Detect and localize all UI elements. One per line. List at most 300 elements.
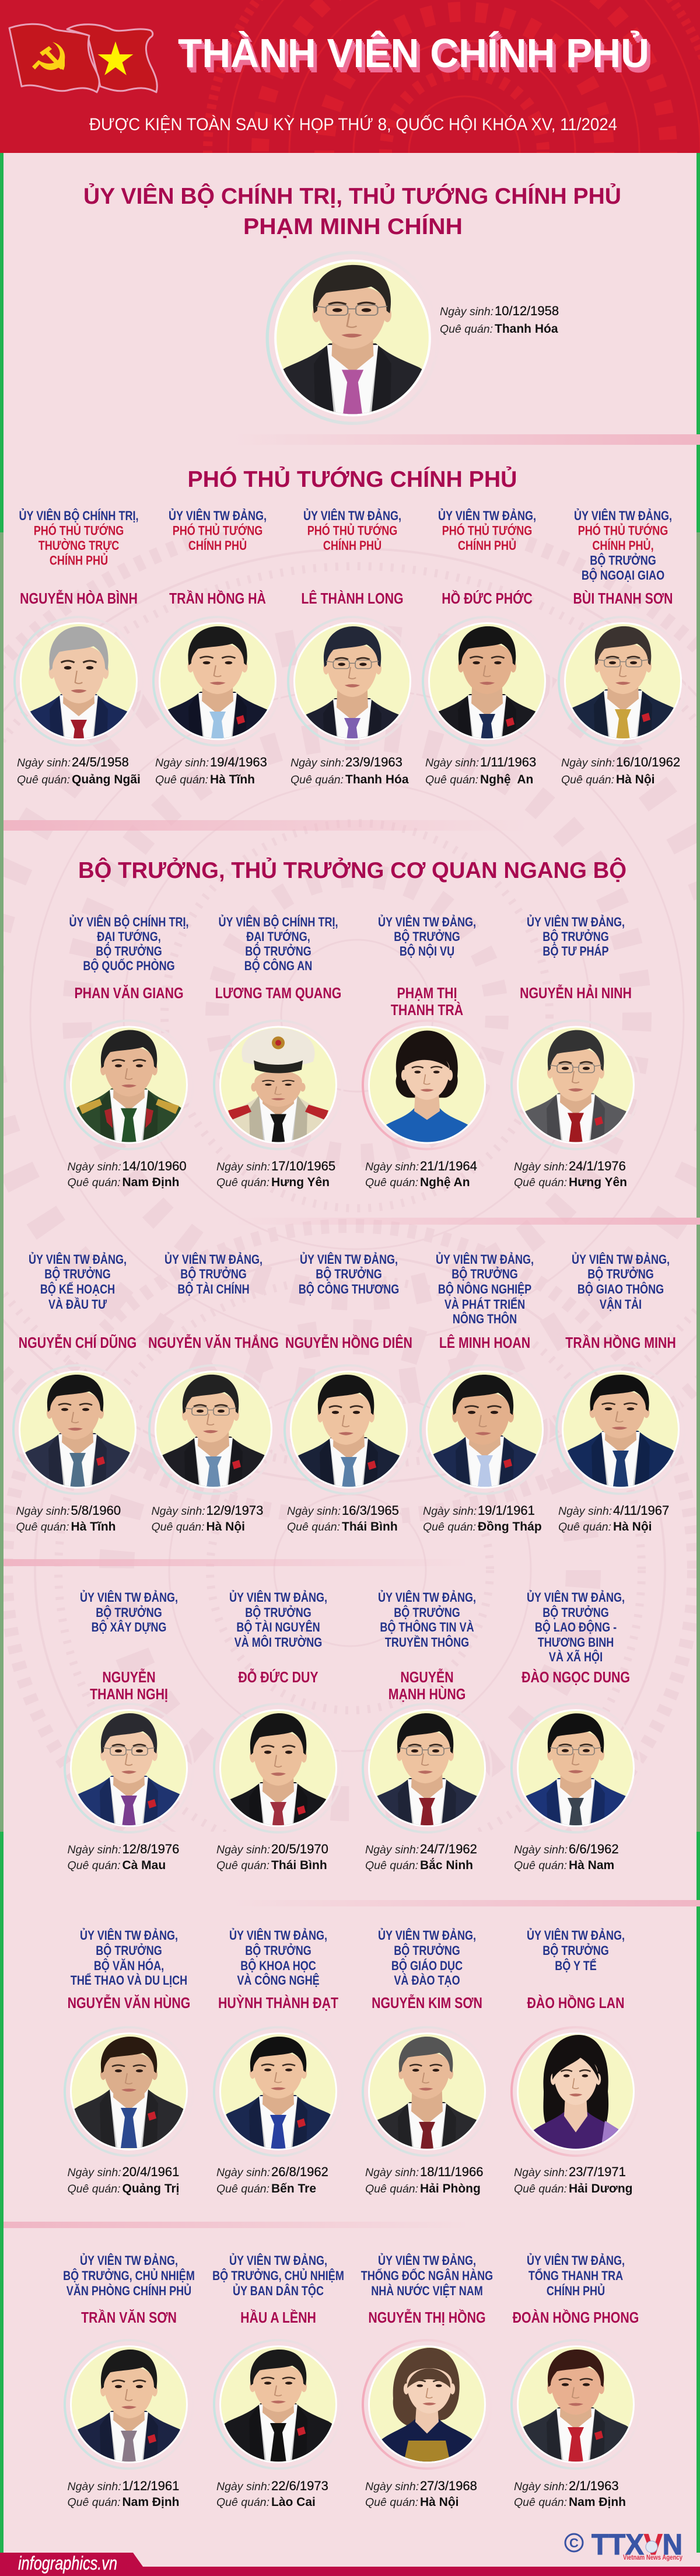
role: VÀ MÔI TRƯỜNG xyxy=(235,1634,322,1650)
person: Lê Minh Hoan xyxy=(418,1252,552,1533)
bio: 24/1/1976 xyxy=(569,1159,626,1173)
role: BỘ TRƯỞNG xyxy=(245,1605,312,1620)
person: Nguyễn Thanh Nghị xyxy=(62,1589,196,1872)
name: ĐÀO NGỌC DUNG xyxy=(522,1668,630,1686)
bio: Ngày sinh: xyxy=(365,2166,419,2179)
footer bar xyxy=(0,2553,700,2576)
bio: 1/12/1961 xyxy=(123,2479,179,2493)
bio: Thái Bình xyxy=(271,1859,327,1872)
panel: deputy prime ministers xyxy=(12,508,690,786)
bio: 23/9/1963 xyxy=(345,755,402,769)
bio xyxy=(216,2164,328,2195)
bio: Hà Tĩnh xyxy=(210,773,255,786)
portrait xyxy=(509,1704,643,1838)
role: TỔNG THANH TRA xyxy=(528,2268,623,2283)
person: Trần Hồng Hà xyxy=(150,508,285,786)
name: NGUYỄN xyxy=(102,1668,156,1686)
role: ỦY VIÊN BỘ CHÍNH TRỊ, xyxy=(218,914,338,929)
bio: Quê quán: xyxy=(423,1521,476,1533)
bio: 4/11/1967 xyxy=(613,1503,669,1518)
role: CHÍNH PHỦ xyxy=(323,538,382,553)
portrait xyxy=(10,1365,145,1494)
bio: Phạm Minh Chính: 10/12/1958 xyxy=(495,304,559,318)
bio: Quê quán: xyxy=(365,2496,418,2509)
name: LÊ MINH HOAN xyxy=(439,1334,530,1352)
role xyxy=(527,2253,625,2298)
person: Đào Ngọc Dung xyxy=(509,1589,643,1872)
bio: Hà Nội xyxy=(206,1520,245,1533)
role xyxy=(303,508,401,553)
name: TRẦN HỒNG MINH xyxy=(565,1334,676,1352)
portrait xyxy=(150,617,285,752)
role xyxy=(572,1252,670,1312)
bio: Quê quán: xyxy=(558,1521,611,1533)
portrait xyxy=(360,2027,494,2162)
bio: Ngày sinh: xyxy=(365,1843,419,1856)
role: ỦY BAN DÂN TỘC xyxy=(233,2283,324,2298)
role: ỦY VIÊN TW ĐẢNG, xyxy=(80,1589,178,1605)
role: CHÍNH PHỦ xyxy=(547,2283,605,2298)
role: BỘ TRƯỞNG xyxy=(245,943,312,958)
bio xyxy=(216,2479,328,2509)
header banner xyxy=(0,0,700,153)
bio xyxy=(514,2479,626,2509)
person: Trần Văn Sơn xyxy=(62,2253,196,2509)
bio xyxy=(68,1842,179,1872)
role: PHÓ THỦ TƯỚNG xyxy=(442,523,532,538)
bio xyxy=(514,2164,632,2195)
role xyxy=(527,1589,625,1664)
role: THỐNG ĐỐC NGÂN HÀNG xyxy=(361,2268,493,2283)
bio: Phạm Minh Chính: Ngày sinh: xyxy=(440,305,494,318)
name: HẦU A LỀNH xyxy=(240,2309,316,2327)
name: THANH NGHỊ xyxy=(90,1686,168,1703)
bio xyxy=(425,755,536,786)
role: ỦY VIÊN TW ĐẢNG, xyxy=(438,508,536,523)
portrait xyxy=(556,617,690,750)
bio: Quảng Trị xyxy=(123,2182,180,2195)
role: BỘ TRƯỞNG xyxy=(590,553,656,568)
name: BÙI THANH SƠN xyxy=(573,590,673,608)
bio: 12/9/1973 xyxy=(206,1503,263,1518)
bio: Quê quán: xyxy=(68,2496,121,2509)
name: TRẦN HỒNG HÀ xyxy=(169,590,266,608)
bio: Ngày sinh: xyxy=(68,2480,121,2493)
bio: Lào Cai xyxy=(271,2495,316,2509)
name: TRẦN VĂN SƠN xyxy=(81,2309,177,2327)
bio: Quê quán: xyxy=(68,1859,121,1872)
bio: Nghệ An xyxy=(420,1176,470,1189)
role: CHÍNH PHỦ, xyxy=(592,538,654,553)
role: ỦY VIÊN TW ĐẢNG, xyxy=(229,2253,327,2268)
bio: 1/11/1963 xyxy=(480,755,536,769)
person: Nguyễn Hòa Bình xyxy=(12,508,146,786)
bio: 5/8/1960 xyxy=(71,1503,121,1518)
role: ỦY VIÊN TW ĐẢNG, xyxy=(527,1927,625,1943)
role: VĂN PHÒNG CHÍNH PHỦ xyxy=(66,2283,191,2298)
name: NGUYỄN VĂN HÙNG xyxy=(68,1993,190,2012)
person: Trần Hồng Minh xyxy=(554,1252,688,1533)
heading: ministers: BỘ TRƯỞNG, THỦ TRƯỞNG CƠ QUAN NGANG BỘ xyxy=(78,857,626,883)
bio: Quê quán: xyxy=(425,773,478,786)
role: BỘ TRƯỞNG xyxy=(394,929,460,944)
role: THƯƠNG BINH xyxy=(538,1636,614,1650)
role: ỦY VIÊN TW ĐẢNG, xyxy=(378,1589,476,1605)
name: NGUYỄN VĂN THẮNG xyxy=(148,1333,279,1352)
panel: ministers row 1 xyxy=(62,914,643,1189)
portrait xyxy=(360,1704,494,1838)
bio: 20/4/1961 xyxy=(123,2164,179,2179)
role xyxy=(19,508,139,568)
name xyxy=(391,985,463,1019)
bio: Ngày sinh: xyxy=(287,1505,341,1518)
portrait xyxy=(211,2340,345,2469)
role: ỦY VIÊN BỘ CHÍNH TRỊ, xyxy=(19,508,139,523)
role xyxy=(378,914,476,958)
person: Lê Thành Long xyxy=(285,508,419,786)
bio: Bến Tre xyxy=(271,2182,316,2195)
bio: Quê quán: xyxy=(514,2183,567,2195)
bio: Ngày sinh: xyxy=(17,757,71,769)
person: Đoàn Hồng Phong xyxy=(509,2253,643,2509)
title: THÀNH VIÊN CHÍNH PHỦ xyxy=(178,30,649,76)
logo: TTXVN: TTXVN xyxy=(592,2528,682,2561)
bio: Quê quán: xyxy=(514,1859,567,1872)
role: BỘ TRƯỞNG xyxy=(542,1605,609,1620)
bio: Ngày sinh: xyxy=(68,1160,121,1173)
bio: Quê quán: xyxy=(155,773,208,786)
name xyxy=(388,1668,466,1703)
role: ỦY VIÊN TW ĐẢNG, xyxy=(303,508,401,523)
bio xyxy=(17,755,141,786)
portrait xyxy=(62,1020,196,1149)
bio: 22/6/1973 xyxy=(271,2479,328,2493)
bio xyxy=(68,2479,180,2509)
bio: 16/10/1962 xyxy=(616,755,680,769)
bio: Phạm Minh Chính xyxy=(440,304,559,336)
role: ỦY VIÊN BỘ CHÍNH TRỊ, xyxy=(69,914,189,929)
name: HỒ ĐỨC PHỚC xyxy=(442,590,533,608)
role: BỘ TRƯỞNG xyxy=(96,1943,162,1958)
role xyxy=(229,1589,327,1650)
person: Phan Văn Giang xyxy=(62,914,196,1189)
role: BỘ TRƯỞNG xyxy=(394,1605,460,1620)
role xyxy=(29,1252,127,1312)
role xyxy=(378,1927,476,1988)
bio: Quê quán: xyxy=(17,773,70,786)
bio xyxy=(216,1842,328,1872)
bio: Quê quán: xyxy=(290,773,344,786)
bio: Hải Dương xyxy=(569,2182,632,2195)
name: THANH TRÀ xyxy=(391,1001,463,1019)
portrait xyxy=(211,1020,345,1155)
role xyxy=(229,1927,327,1988)
role: ỦY VIÊN TW ĐẢNG, xyxy=(80,2253,178,2268)
role xyxy=(63,2253,195,2298)
bio xyxy=(514,1159,627,1189)
role: VÀ ĐẦU TƯ xyxy=(48,1297,107,1312)
bio: Hà Nội xyxy=(616,773,655,786)
bio: Ngày sinh: xyxy=(514,2480,568,2493)
role xyxy=(574,508,672,583)
role: BỘ THÔNG TIN VÀ xyxy=(380,1619,474,1634)
role: PHÓ THỦ TƯỚNG xyxy=(34,523,124,538)
icon: Vietnam flag xyxy=(67,25,157,92)
role: BỘ TRƯỞNG xyxy=(316,1266,382,1281)
role: BỘ QUỐC PHÒNG xyxy=(83,958,175,973)
role: ĐẠI TƯỚNG, xyxy=(97,929,161,944)
name: NGUYỄN HỒNG DIÊN xyxy=(285,1333,412,1352)
bio: Ngày sinh: xyxy=(514,1843,568,1856)
role xyxy=(71,1927,187,1988)
portrait: Phạm Minh Chính xyxy=(264,253,442,423)
bio: Ngày sinh: xyxy=(152,1505,205,1518)
name: NGUYỄN CHÍ DŨNG xyxy=(19,1333,136,1352)
role: BỘ GIAO THÔNG xyxy=(578,1281,664,1296)
bio: 19/4/1963 xyxy=(210,755,267,769)
person: Nguyễn Chí Dũng xyxy=(10,1252,145,1533)
role: THỂ THAO VÀ DU LỊCH xyxy=(71,1973,187,1988)
bio xyxy=(365,2479,477,2509)
role: BỘ TRƯỞNG xyxy=(180,1266,247,1281)
heading: deputy prime ministers: PHÓ THỦ TƯỚNG CHÍNH PHỦ xyxy=(188,466,517,492)
role: NÔNG THÔN xyxy=(453,1311,517,1326)
name: PHẠM THỊ xyxy=(397,985,457,1002)
role: ỦY VIÊN TW ĐẢNG, xyxy=(527,914,625,929)
role: ỦY VIÊN TW ĐẢNG, xyxy=(436,1252,534,1267)
person: Nguyễn Kim Sơn xyxy=(360,1927,494,2195)
role: VÀ ĐÀO TẠO xyxy=(394,1973,460,1988)
heading: prime minister role: ỦY VIÊN BỘ CHÍNH TRỊ, THỦ TƯỚNG CHÍNH PHỦ xyxy=(83,183,621,209)
person: Nguyễn Văn Thắng xyxy=(146,1252,281,1533)
name: PHAN VĂN GIANG xyxy=(74,984,184,1002)
bio: Ngày sinh: xyxy=(514,2166,568,2179)
bio: Quê quán: xyxy=(68,1176,121,1189)
person: Nguyễn Hải Ninh xyxy=(509,914,643,1189)
name: NGUYỄN HÒA BÌNH xyxy=(20,589,138,608)
role: BỘ TRƯỞNG, CHỦ NHIỆM xyxy=(63,2268,195,2283)
portrait xyxy=(282,1365,416,1497)
bio: 21/1/1964 xyxy=(420,1159,477,1173)
bio xyxy=(287,1503,399,1533)
bio: 12/8/1976 xyxy=(123,1842,179,1856)
portrait xyxy=(211,2027,345,2156)
bio xyxy=(152,1503,263,1533)
bio xyxy=(561,755,680,786)
portrait xyxy=(418,1365,552,1496)
bio: Quê quán: xyxy=(561,773,614,786)
bio: Phạm Minh Chính: Thanh Hóa xyxy=(495,322,558,336)
name: LÊ THÀNH LONG xyxy=(301,590,404,608)
bio: Ngày sinh: xyxy=(216,2166,270,2179)
role: ỦY VIÊN TW ĐẢNG, xyxy=(527,2253,625,2268)
bio: Nam Định xyxy=(123,2495,180,2509)
role: THƯỜNG TRỰC xyxy=(38,538,119,553)
portrait xyxy=(13,616,143,747)
name: ĐOÀN HỒNG PHONG xyxy=(513,2309,639,2327)
portrait xyxy=(363,2340,491,2477)
bio: Ngày sinh: xyxy=(365,2480,419,2493)
bio: Quê quán: xyxy=(365,1859,418,1872)
role: ĐẠI TƯỚNG, xyxy=(246,929,310,944)
role: NHÀ NƯỚC VIỆT NAM xyxy=(371,2283,483,2298)
role: BỘ KẾ HOẠCH xyxy=(40,1281,115,1296)
bio: Thái Bình xyxy=(342,1520,398,1533)
role: BỘ TRƯỞNG xyxy=(96,1605,162,1620)
bio: 2/1/1963 xyxy=(569,2479,619,2493)
logo: TTXVN: Vietnam News Agency xyxy=(623,2554,683,2561)
role: ỦY VIÊN TW ĐẢNG, xyxy=(164,1252,262,1267)
bio xyxy=(558,1503,669,1533)
bio: 6/6/1962 xyxy=(569,1842,619,1856)
bio: Đồng Tháp xyxy=(478,1520,542,1533)
bio: Quê quán: xyxy=(216,2496,270,2509)
bio xyxy=(68,2164,180,2195)
name: NGUYỄN KIM SƠN xyxy=(372,1993,482,2012)
bio: Hà Tĩnh xyxy=(71,1520,116,1533)
role: ỦY VIÊN TW ĐẢNG, xyxy=(378,914,476,929)
role: ỦY VIÊN TW ĐẢNG, xyxy=(169,508,267,523)
role: VÀ CÔNG NGHỆ xyxy=(237,1972,320,1988)
role: CHÍNH PHỦ xyxy=(458,538,516,553)
role xyxy=(80,1589,178,1634)
panel: ministers row 3 xyxy=(62,1589,643,1872)
bio: 24/7/1962 xyxy=(420,1842,477,1856)
role: BỘ Y TẾ xyxy=(555,1958,597,1973)
person: Hầu A Lềnh xyxy=(211,2253,345,2509)
role: BỘ TRƯỞNG xyxy=(44,1266,111,1281)
bio: Ngày sinh: xyxy=(216,2480,270,2493)
bio: Thanh Hóa xyxy=(345,773,409,786)
role: BỘ TRƯỞNG xyxy=(245,1943,312,1958)
logo: TTXVN: C xyxy=(569,2536,579,2550)
portrait xyxy=(62,2027,196,2156)
person: Nguyễn Văn Hùng xyxy=(62,1927,196,2195)
person: Hồ Đức Phớc xyxy=(420,508,554,786)
bio: Quê quán: xyxy=(514,2496,567,2509)
role: ỦY VIÊN TW ĐẢNG, xyxy=(378,2253,476,2268)
bio: 23/7/1971 xyxy=(569,2164,626,2179)
role: BỘ VĂN HÓA, xyxy=(94,1958,164,1973)
portrait xyxy=(509,2340,643,2469)
bio xyxy=(514,1842,619,1872)
bio: Quảng Ngãi xyxy=(72,773,141,786)
role: ỦY VIÊN TW ĐẢNG, xyxy=(527,1589,625,1605)
name: ĐÀO HỒNG LAN xyxy=(527,1994,624,2012)
role: CHÍNH PHỦ xyxy=(50,553,108,568)
name xyxy=(90,1668,168,1703)
panel: ministers row 4 xyxy=(62,1927,640,2195)
bio xyxy=(365,1159,477,1189)
role: BỘ GIÁO DỤC xyxy=(391,1958,463,1973)
role: ỦY VIÊN TW ĐẢNG, xyxy=(80,1927,178,1943)
name: ĐỖ ĐỨC DUY xyxy=(238,1668,318,1686)
bio: Ngày sinh: xyxy=(365,1160,419,1173)
person: Lương Tam Quang xyxy=(211,914,345,1189)
role: BỘ TRƯỞNG xyxy=(542,929,609,944)
name: MẠNH HÙNG xyxy=(388,1685,466,1703)
role: BỘ TƯ PHÁP xyxy=(542,943,609,958)
role: BỘ NÔNG NGHIỆP xyxy=(438,1281,531,1296)
role xyxy=(436,1252,534,1326)
bio: Cà Mau xyxy=(123,1859,166,1872)
role: CHÍNH PHỦ xyxy=(188,538,247,553)
role xyxy=(527,1927,625,1973)
name: LƯƠNG TAM QUANG xyxy=(215,985,341,1002)
portrait xyxy=(512,2027,640,2164)
name: HUỲNH THÀNH ĐẠT xyxy=(218,1994,338,2012)
bio: Ngày sinh: xyxy=(68,2166,121,2179)
name: NGUYỄN xyxy=(400,1668,454,1686)
bio: Nam Định xyxy=(569,2495,626,2509)
bio: Ngày sinh: xyxy=(290,757,344,769)
role: ỦY VIÊN TW ĐẢNG, xyxy=(229,1589,327,1605)
name: NGUYỄN THỊ HỒNG xyxy=(368,2308,486,2327)
bio: Ngày sinh: xyxy=(216,1160,270,1173)
bio: Quê quán: xyxy=(16,1521,69,1533)
portrait xyxy=(287,616,416,747)
bio: Hải Phòng xyxy=(420,2182,481,2195)
bio: Hà Nội xyxy=(420,2495,459,2509)
bio: Quê quán: xyxy=(216,1176,270,1189)
portrait xyxy=(62,2340,196,2471)
role: PHÓ THỦ TƯỚNG xyxy=(173,523,262,538)
bio xyxy=(365,1842,477,1872)
role xyxy=(527,914,625,958)
bio: Hà Nội xyxy=(613,1520,652,1533)
person: Phạm Thị Thanh Trà xyxy=(363,914,491,1189)
subtitle: ĐƯỢC KIỆN TOÀN SAU KỲ HỌP THỨ 8, QUỐC HỘI KHÓA XV, 11/2024 xyxy=(89,114,617,134)
footer source text: infographics.vn xyxy=(18,2553,117,2574)
role: ỦY VIÊN TW ĐẢNG, xyxy=(29,1252,127,1267)
heading: prime minister name: PHẠM MINH CHÍNH xyxy=(243,214,463,239)
portrait xyxy=(554,1365,688,1494)
portrait xyxy=(62,1704,196,1836)
role xyxy=(361,2253,493,2298)
bio: Ngày sinh: xyxy=(216,1843,270,1856)
role: BỘ TRƯỞNG xyxy=(452,1266,518,1281)
bio: 18/11/1966 xyxy=(420,2164,483,2179)
bio: 17/10/1965 xyxy=(271,1159,335,1173)
bio xyxy=(68,1159,187,1189)
bio: Quê quán: xyxy=(68,2183,121,2195)
bio: 20/5/1970 xyxy=(271,1842,328,1856)
bio xyxy=(155,755,267,786)
person: Nguyễn Mạnh Hùng xyxy=(360,1589,494,1872)
bio: Ngày sinh: xyxy=(561,757,615,769)
bio: Phạm Minh Chính: Quê quán: xyxy=(440,323,493,336)
role: BỘ LAO ĐỘNG - xyxy=(535,1619,617,1634)
bio xyxy=(423,1503,542,1533)
panel: prime minister xyxy=(83,183,621,423)
role: BỘ TÀI NGUYÊN xyxy=(236,1619,320,1634)
role: ỦY VIÊN TW ĐẢNG, xyxy=(300,1252,398,1267)
bio: Hà Nam xyxy=(569,1859,614,1872)
role: ỦY VIÊN TW ĐẢNG, xyxy=(572,1252,670,1267)
bio: Quê quán: xyxy=(216,1859,270,1872)
role: BỘ TRƯỞNG xyxy=(587,1266,654,1281)
role: BỘ CÔNG AN xyxy=(244,958,312,973)
bio: 19/1/1961 xyxy=(478,1503,535,1518)
portrait xyxy=(146,1365,281,1497)
role: BỘ TRƯỞNG xyxy=(96,943,162,958)
person: Nguyễn Thị Hồng xyxy=(361,2253,493,2509)
role: BỘ TÀI CHÍNH xyxy=(177,1281,250,1296)
name: NGUYỄN HẢI NINH xyxy=(520,984,632,1002)
portrait xyxy=(420,617,554,754)
bio: Ngày sinh: xyxy=(16,1505,70,1518)
person: Huỳnh Thành Đạt xyxy=(211,1927,345,2195)
